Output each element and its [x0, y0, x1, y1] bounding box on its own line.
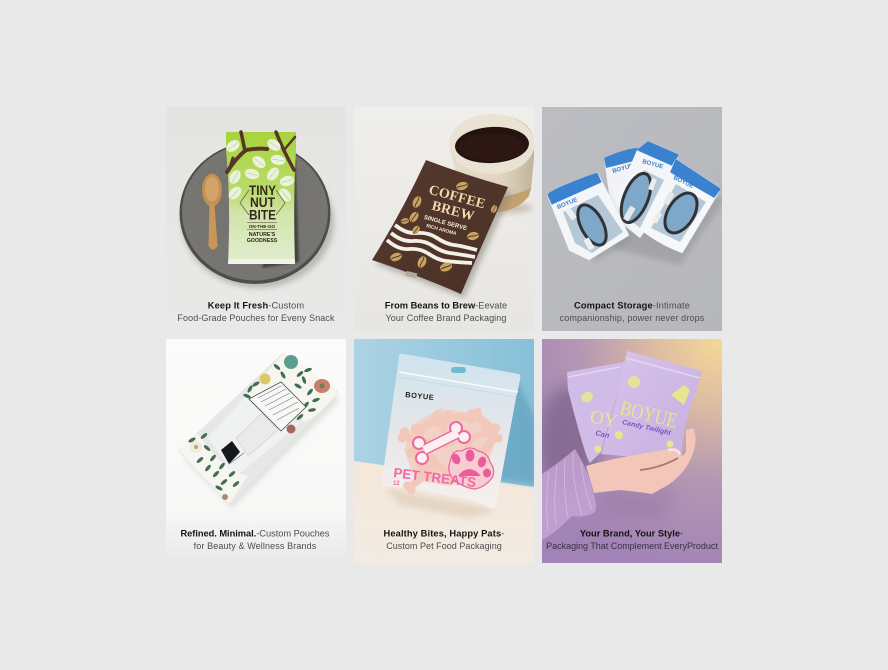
caption: compact storage: -Intimate — [653, 300, 690, 310]
panel: healthy bites pet treats pouch — [354, 339, 536, 563]
panel: refined minimal beauty pouch — [166, 339, 346, 563]
caption: refined minimal: for Beauty & Wellness Brands — [194, 541, 317, 551]
caption: keep it fresh: Keep It Fresh — [208, 300, 268, 310]
frosted pouch: 12 — [393, 481, 400, 487]
sheer ruffled sleeve — [542, 449, 596, 540]
food pouch with label: NUT — [250, 195, 276, 210]
coffee sachet with label — [372, 160, 512, 298]
food pouch with label: NATURE'S — [249, 232, 276, 238]
caption: refined minimal: Refined. Minimal. — [180, 528, 256, 538]
panel: coffee brew sachet — [372, 114, 534, 323]
icon: bone label — [412, 422, 470, 464]
caption: healthy bites: Healthy Bites, Happy Pats — [384, 528, 501, 538]
shadow of pouch on wall — [500, 382, 534, 488]
icon: wooden spoon — [202, 174, 222, 250]
food pouch with label — [224, 132, 299, 268]
lilac pouches: Candy Twilight — [622, 419, 672, 437]
caption: healthy bites: Custom Pet Food Packaging — [386, 541, 502, 551]
coffee sachet with label: RICH AROMA — [426, 223, 458, 237]
caption: keep it fresh: -Custom — [268, 300, 304, 310]
panel: your brand your style — [538, 339, 722, 563]
cable bag: centre — [620, 141, 679, 228]
coffee sachet with label: BREW — [430, 199, 476, 225]
pouch brand text: BOYUE — [618, 396, 680, 433]
food pouch with label: GOODNESS — [247, 238, 278, 244]
caption: from beans to brew: -Eevate — [475, 300, 507, 310]
caption: your brand: - — [680, 528, 683, 538]
food pouch with label: BITE — [249, 208, 276, 222]
caption: refined minimal: -Custom Pouches — [256, 528, 330, 538]
caption: from beans to brew: From Beans to Brew — [385, 300, 476, 310]
dog treats — [398, 408, 502, 494]
food pouch with label: TINY — [249, 183, 276, 198]
floral clear pouch — [179, 354, 340, 508]
caption: healthy bites: - — [501, 528, 504, 538]
panel: compact storage cable bags — [542, 107, 725, 331]
caption: compact storage: companionship, power never drops — [560, 313, 705, 323]
cable bag: middle back — [604, 148, 725, 265]
caption: compact storage: Compact Storage — [574, 300, 653, 310]
cable bag: right — [641, 160, 720, 252]
hand — [586, 428, 696, 494]
cable bag: middle back: BOYUE — [612, 163, 634, 175]
caption: your brand: Your Brand, Your Style — [580, 528, 680, 538]
icon: paw label — [449, 448, 494, 489]
cable bag: left: BOYUE — [557, 197, 579, 211]
coffee sachet with label: COFFEE — [427, 183, 487, 212]
caption: from beans to brew: Your Coffee Brand Packaging — [385, 313, 507, 323]
frosted pouch — [382, 354, 520, 509]
cable bag: centre: BOYUE — [641, 159, 664, 170]
caption: keep it fresh: Food-Grade Pouches for Eveny Snack — [177, 313, 335, 323]
cable bag: left — [548, 173, 632, 262]
food pouch with label: ON-THE-GO — [249, 224, 276, 229]
coffee sachet with label: SINGLE SERVE — [423, 215, 467, 232]
brand text BOYUE: BOYUE — [405, 390, 435, 402]
icon: stone plate — [180, 142, 334, 288]
product name: PET TREATS — [393, 465, 477, 490]
caption: your brand: Packaging That Complement EveryProduct — [546, 541, 718, 551]
cable bag: right: BOYUE — [672, 175, 694, 190]
lilac pouches — [567, 351, 702, 469]
lilac pouches: Can — [595, 428, 611, 440]
panel: keep it fresh food pouch — [178, 130, 338, 323]
lilac pouches: OY — [588, 406, 619, 433]
icon: coffee cup — [449, 114, 535, 214]
